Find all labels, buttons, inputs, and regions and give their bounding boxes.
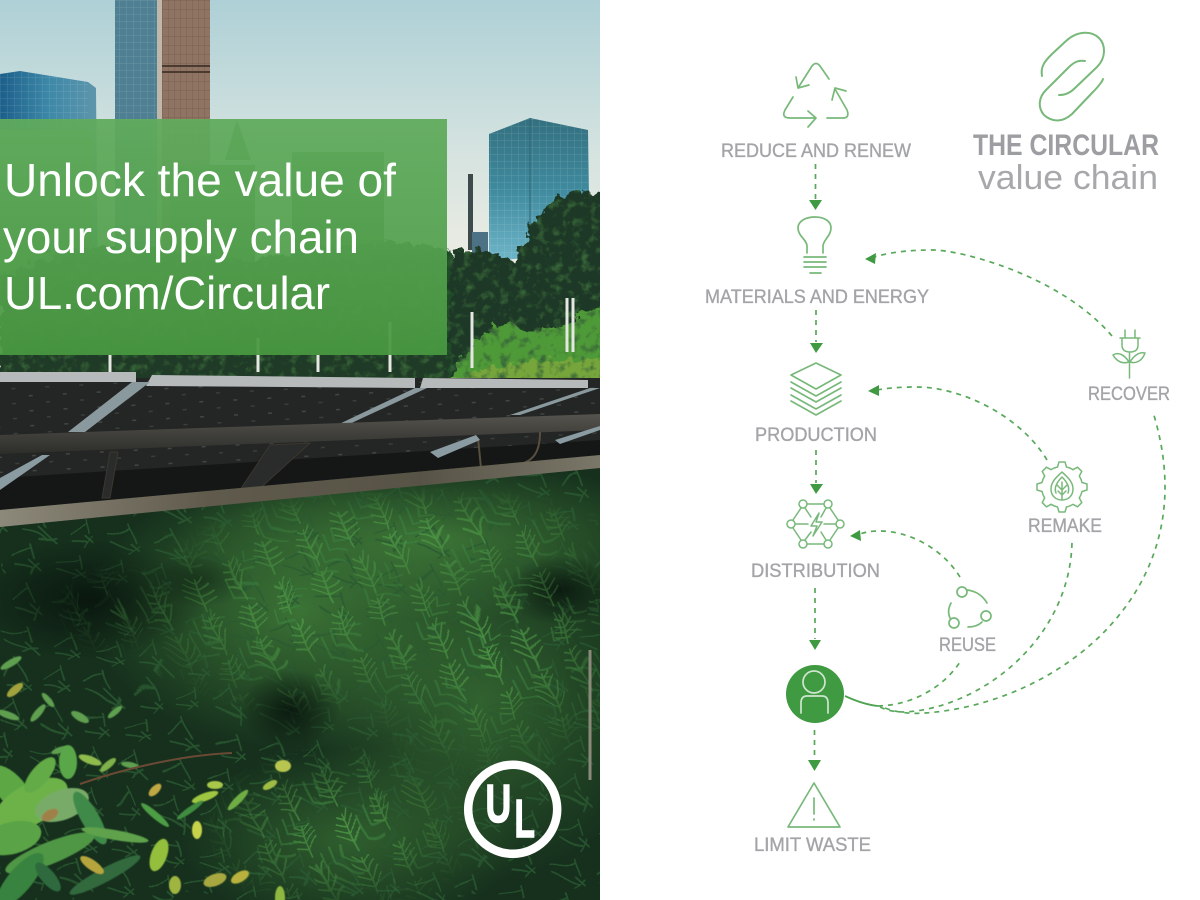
arrow: user to limit waste [808, 730, 821, 771]
left glass building [0, 71, 98, 300]
arrow: production to distribution [810, 450, 823, 494]
title [973, 129, 1159, 197]
small leaves at left edge [0, 654, 139, 774]
solar array [0, 372, 600, 527]
icon: warning triangle [788, 783, 840, 827]
title: THE CIRCULAR [973, 129, 1159, 162]
label: production: PRODUCTION [755, 425, 877, 446]
buildings behind the banner [210, 122, 384, 263]
right glass building [468, 118, 590, 262]
label: remake: REMAKE [1028, 516, 1102, 537]
label: recover: RECOVER [1088, 384, 1170, 405]
icon: gear with sprout [1037, 462, 1087, 512]
banner text [3, 154, 396, 319]
arrow: recover to materials [865, 250, 1112, 336]
arrow: distribution to user [809, 588, 821, 650]
foliage [0, 455, 600, 900]
label: limit waste: LIMIT WASTE [754, 835, 871, 856]
panel top edges [0, 372, 588, 388]
arrow: reuse to distribution [850, 530, 960, 577]
label: reduce and renew: REDUCE AND RENEW [721, 141, 911, 162]
arrow: reduce to materials [809, 164, 822, 210]
label: reuse: REUSE [939, 635, 996, 656]
banner: call to action [0, 119, 447, 355]
arrow: materials to production [810, 310, 823, 353]
icon: paperclip [1040, 33, 1104, 120]
post at right edge [588, 650, 592, 780]
lower rail [0, 455, 600, 527]
photo panel: city, solar panels and foliage [0, 0, 600, 900]
icon: plug with leaves [1113, 330, 1145, 378]
return loops from user [845, 412, 1165, 713]
panel: circular value chain diagram [705, 33, 1170, 856]
trees [0, 191, 610, 385]
arrow: remake to production [868, 385, 1047, 460]
banner text: UL.com/Circular [4, 267, 330, 319]
UL logo: U [486, 774, 511, 834]
UL logo [468, 765, 557, 854]
label: distribution: DISTRIBUTION [751, 561, 880, 582]
label: materials and energy: MATERIALS AND ENERGY [705, 287, 929, 308]
tall tower [115, 0, 210, 260]
icon: user [786, 665, 844, 723]
icon: layers [791, 363, 841, 415]
banner text: Unlock the value of [4, 154, 396, 206]
icon: reuse loop [949, 587, 991, 628]
beam [0, 414, 600, 454]
banner text: your supply chain [3, 211, 359, 263]
sky [0, 0, 600, 380]
lamp posts [110, 298, 573, 372]
bright leaves at bottom left [0, 745, 291, 900]
title: value chain [978, 159, 1158, 197]
icon: energy network [787, 500, 844, 548]
icon: recycle [784, 64, 848, 127]
branch [80, 753, 232, 784]
UL logo: L [514, 788, 535, 849]
icon: light bulb [798, 217, 831, 273]
